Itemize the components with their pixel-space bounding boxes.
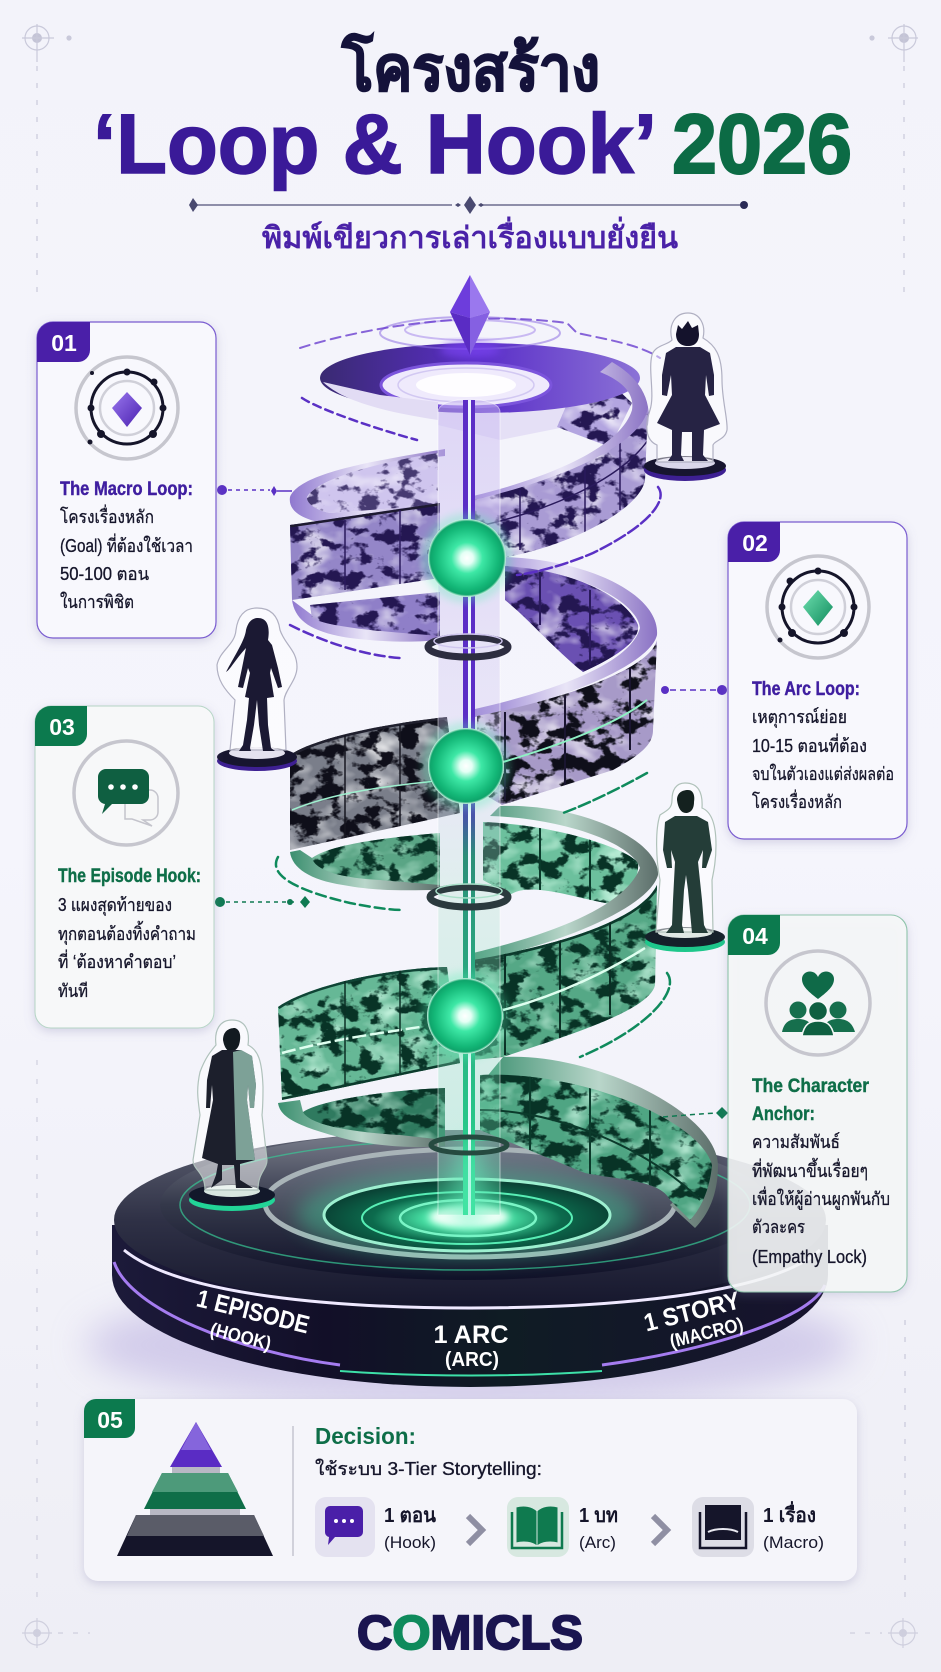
ring: middle <box>430 884 508 907</box>
title divider <box>189 196 748 214</box>
text: character anchor: The Character <box>752 1076 870 1097</box>
badge 01: 01 <box>51 330 77 356</box>
base platform <box>85 1130 855 1407</box>
platform label: 1 arc: 1 ARC <box>434 1321 508 1349</box>
platform label: 1 episode <box>188 1285 312 1363</box>
central glass column <box>438 399 500 1240</box>
text: arc loop: โครงเรื่องหลัก <box>752 789 842 812</box>
text: arc loop <box>752 679 894 812</box>
title: 2026 <box>672 97 852 191</box>
tier 2: arc: 1 บท <box>579 1505 618 1527</box>
text: character anchor: ที่พัฒนาขึ้นเรื่อยๆ <box>752 1158 868 1181</box>
badge 05 <box>84 1399 135 1438</box>
platform label: 1 episode: 1 EPISODE <box>194 1285 312 1339</box>
corner decoration: bottom right <box>850 1618 918 1648</box>
text: character anchor: ความสัมพันธ์ <box>752 1132 840 1152</box>
text: macro loop: The Macro Loop: <box>60 479 193 500</box>
text: macro loop: ในการพิชิต <box>60 591 134 612</box>
glowing sphere 2 <box>422 722 510 810</box>
platform label: 1 story: 1 STORY <box>641 1286 743 1337</box>
tier 1: episode: (Hook) <box>384 1533 436 1552</box>
panel 04: the character anchor <box>728 915 907 1292</box>
badge 02: 02 <box>742 530 768 556</box>
connector: card 02 <box>661 685 727 695</box>
acrylic figure: man right <box>645 783 725 952</box>
spiral ribbon: second front band <box>285 635 660 855</box>
spiral ribbon: lower purple turn interior <box>292 557 657 717</box>
badge 02 <box>728 522 780 562</box>
text: macro loop: (Goal) ที่ต้องใช้เวลา <box>60 533 193 556</box>
panel 01: the macro loop <box>37 322 216 638</box>
spiral ribbon: top purple turn interior <box>290 394 632 522</box>
badge 03: 03 <box>49 714 75 740</box>
text: episode hook: ทันที <box>58 981 88 1001</box>
corner decoration: top left <box>22 24 71 295</box>
tier 1: episode: 1 ตอน <box>384 1505 436 1527</box>
panel 02: the arc loop <box>728 522 907 839</box>
text: character anchor: ตัวละคร <box>752 1217 805 1237</box>
tier 2: arc <box>507 1497 618 1557</box>
platform label: 1 story <box>641 1286 748 1358</box>
text: character anchor: (Empathy Lock) <box>752 1247 867 1267</box>
corner decoration: top right <box>870 24 918 1600</box>
title <box>93 32 852 191</box>
text: macro loop: โครงเรื่องหลัก <box>60 504 154 527</box>
text: character anchor: Anchor: <box>752 1104 815 1125</box>
panel 05: decision <box>84 1399 857 1581</box>
text: macro loop <box>60 479 193 612</box>
platform label: 1 arc <box>434 1321 508 1371</box>
tier 3: story: 1 เรื่อง <box>763 1500 816 1527</box>
acrylic figure: man in coat top right <box>644 313 727 481</box>
text: character anchor: เพื่อให้ผู้อ่านผูกพันกับ <box>752 1186 890 1210</box>
divider line <box>292 1426 294 1556</box>
platform label: 1 episode: (HOOK) <box>208 1320 273 1355</box>
tier 2: arc: (Arc) <box>579 1533 616 1552</box>
subtitle: พิมพ์เขียวการเล่าเรื่องแบบยั่งยืน <box>262 216 678 255</box>
text: episode hook: ที่ ‘ต้องหาคำตอบ’ <box>58 949 176 972</box>
badge 03 <box>35 706 87 746</box>
decision text: ใช้ระบบ 3-Tier Storytelling: <box>315 1458 542 1479</box>
title: โครงสร้าง <box>341 32 600 104</box>
text: character anchor <box>752 1076 890 1267</box>
glowing sphere 1 <box>422 513 512 603</box>
spiral ribbon: top front band <box>285 400 650 605</box>
spiral ribbon: third front band <box>275 880 660 1105</box>
orbit dashed paths <box>276 317 670 1057</box>
icon: chat bubbles <box>74 741 178 845</box>
text: episode hook: The Episode Hook: <box>58 866 201 887</box>
connector: card 01 <box>217 485 292 496</box>
badge 05: 05 <box>97 1407 123 1433</box>
platform label: 1 story: (MACRO) <box>668 1314 746 1353</box>
icon: macro loop orbit with purple gem <box>76 357 178 459</box>
logo: comicls: COMICLS <box>357 1607 583 1660</box>
tier 3: story: (Macro) <box>763 1533 824 1552</box>
badge 04: 04 <box>742 923 768 949</box>
text: arc loop: 10-15 ตอนที่ต้อง <box>752 733 867 756</box>
text: arc loop: จบในตัวเองแต่ส่งผลต่อ <box>752 763 894 784</box>
ring: upper <box>428 634 508 657</box>
badge 04 <box>728 915 780 955</box>
platform label: 1 arc: (ARC) <box>445 1349 499 1371</box>
text: episode hook: 3 แผงสุดท้ายของ <box>58 895 172 916</box>
text: arc loop: The Arc Loop: <box>752 679 860 700</box>
text: macro loop: 50-100 ตอน <box>60 564 149 584</box>
spiral ribbon: lower green turn interior <box>278 1057 720 1230</box>
text: arc loop: เหตุการณ์ย่อย <box>752 707 847 728</box>
spiral ribbon: upper green turn interior <box>290 806 658 962</box>
decision text <box>315 1423 542 1479</box>
tier 3: story <box>692 1497 824 1557</box>
arrow 2 <box>653 1516 667 1544</box>
decision text: Decision: <box>315 1423 416 1449</box>
glowing sphere 3 <box>421 972 509 1060</box>
arrow 1 <box>468 1516 482 1544</box>
badge 01 <box>37 322 90 362</box>
crystal top <box>440 275 500 358</box>
tier 1: episode <box>315 1497 436 1557</box>
icon: three-tier pyramid <box>117 1422 273 1556</box>
connector: card 04 <box>663 1107 728 1119</box>
spiral top disc <box>320 343 649 504</box>
icon: arc loop orbit with green gem <box>767 556 869 658</box>
icon: heart over three people <box>766 951 870 1055</box>
corner decoration: bottom left <box>22 1060 90 1648</box>
title: ‘Loop & Hook’ <box>93 97 657 191</box>
ring: lower <box>431 1137 507 1153</box>
text: episode hook <box>58 866 201 1001</box>
acrylic figure: long coat left <box>189 1020 275 1211</box>
panel 03: the episode hook <box>35 706 214 1028</box>
connector: card 03 <box>215 896 310 908</box>
acrylic figure: girl left <box>217 608 297 771</box>
text: episode hook: ทุกตอนต้องทิ้งคำถาม <box>58 921 196 945</box>
